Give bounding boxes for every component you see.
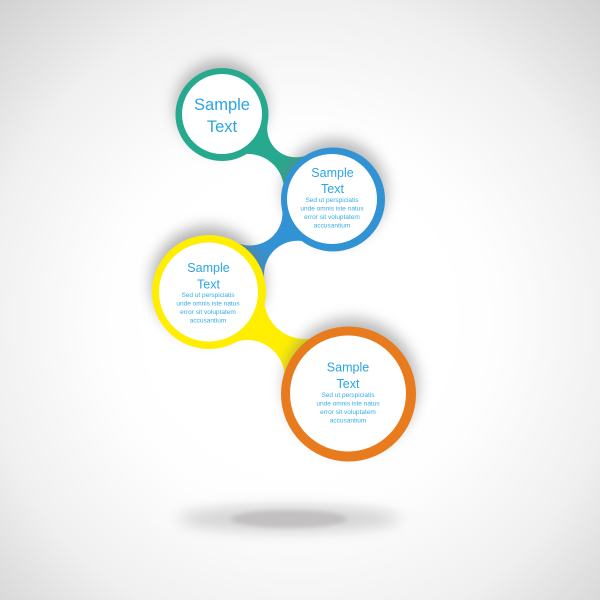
body text: blue node: unde omnis iste natus (300, 206, 364, 212)
connector: yellow to orange (237, 304, 310, 372)
body text: blue node: Sed ut perspiciatis (305, 197, 359, 204)
body text: blue node: accusantium (314, 222, 350, 230)
body text: orange node: error sit voluptatem (320, 409, 376, 416)
shadow: orange circle (284, 318, 418, 452)
heading: orange node: Sample (327, 360, 369, 374)
heading line 2: blue node: Text (321, 182, 344, 196)
body text: orange node: Sed ut perspiciatis (321, 392, 375, 399)
heading: yellow node: Sample (187, 261, 230, 275)
connector: blue to yellow (238, 210, 302, 279)
body text: orange node: unde omnis iste natus (316, 400, 380, 408)
heading: teal node: Sample (194, 96, 250, 114)
body text: blue node (300, 197, 364, 230)
node: orange circle (281, 326, 416, 462)
shadow: yellow circle (151, 226, 265, 340)
heading line 2: teal node: Text (207, 118, 238, 136)
body text: orange node (316, 392, 380, 424)
body text: yellow node: unde omnis iste natus (176, 300, 240, 308)
node: blue circle (281, 148, 385, 252)
node: teal circle (176, 68, 268, 161)
body text: yellow node: Sed ut perspiciatis (181, 292, 235, 299)
shadow: blue circle (283, 139, 387, 243)
heading: blue node: Sample (311, 166, 354, 180)
shadow: teal circle (175, 60, 267, 152)
connector: teal to blue (246, 123, 306, 184)
body text: yellow node: error sit voluptatem (180, 309, 236, 316)
ground shadow (148, 502, 432, 536)
node: yellow circle (152, 235, 266, 349)
body text: yellow node: accusantium (190, 318, 226, 324)
body text: blue node: error sit voluptatem (304, 214, 360, 221)
body text: orange node: accusantium (330, 418, 366, 424)
heading line 2: orange node: Text (337, 377, 360, 391)
heading line 2: yellow node: Text (197, 278, 220, 292)
body text: yellow node (176, 292, 240, 324)
